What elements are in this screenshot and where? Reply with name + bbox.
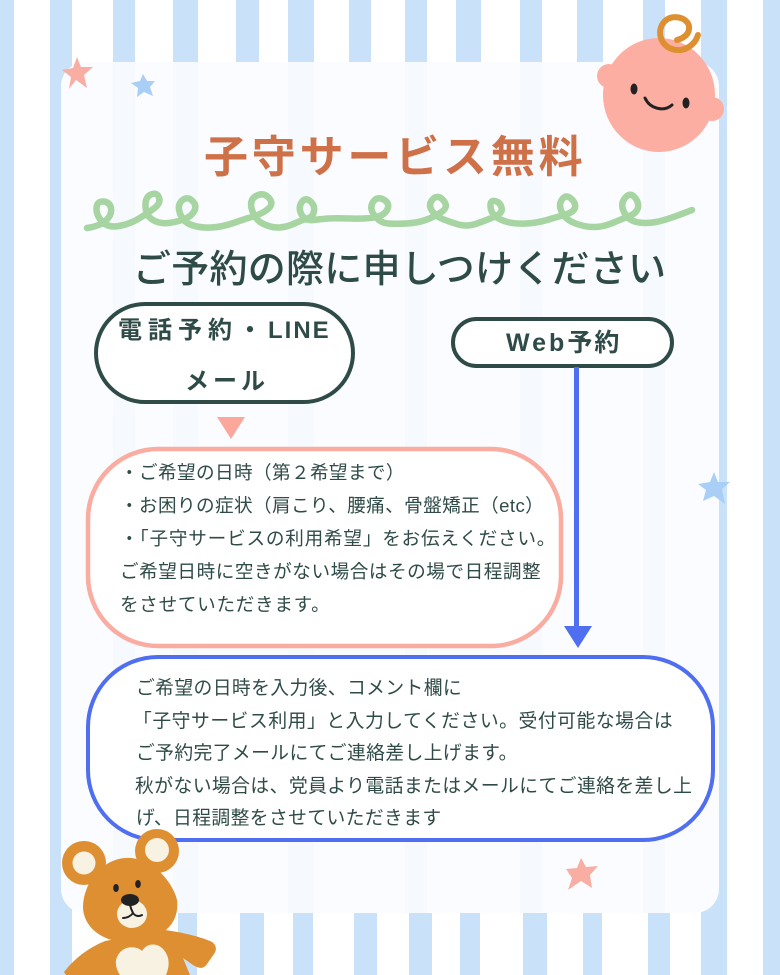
panel: background card (61, 62, 719, 913)
pill: phone, LINE, mail: 電話予約・LINE (118, 317, 331, 344)
panel: phone instructions: をさせていただきます。 (120, 594, 330, 615)
panel: phone instructions: ・ご希望の日時（第２希望まで） (120, 462, 405, 483)
subtitle: ご予約の際に申しつけください (133, 249, 666, 291)
icon: baby face (597, 17, 724, 152)
panel: web instructions: ご予約完了メールにてご連絡差し上げます。 (136, 742, 518, 763)
panel: phone instructions (88, 449, 561, 646)
pill: web booking (453, 319, 672, 366)
panel: phone instructions: ご希望日時に空きがない場合はその場で日程調整 (120, 561, 541, 582)
panel: phone instructions: ・お困りの症状（肩こり、腰痛、骨盤矯正（etc） (120, 495, 544, 516)
panel: web instructions: 秋がない場合は、党員より電話またはメールにてご連絡を差し上 (135, 775, 692, 796)
arrow: blue line to web instructions (564, 367, 592, 648)
icon: pink star top left (62, 57, 93, 89)
icon: blue star top left (131, 74, 155, 97)
arrow: pink triangle (217, 417, 245, 439)
icon: blue star right (698, 472, 730, 504)
panel: web instructions: ご希望の日時を入力後、コメント欄に (136, 677, 462, 698)
pill: phone, LINE, mail: メール (185, 368, 269, 395)
icon: teddy bear (62, 829, 216, 975)
title: 子守サービス無料 (204, 133, 586, 182)
panel: web instructions (88, 657, 713, 840)
icon: pink star bottom right (566, 858, 598, 890)
decorative squiggle (87, 194, 692, 228)
pill: phone, LINE, mail (96, 304, 353, 402)
pill: web booking: Web予約 (506, 329, 621, 357)
panel: phone instructions: ・「子守サービスの利用希望」をお伝えください。 (120, 528, 556, 549)
panel: web instructions: げ、日程調整をさせていただきます (136, 807, 442, 828)
panel: web instructions: 「子守サービス利用」と入力してください。受付可能な場合は (133, 710, 673, 731)
